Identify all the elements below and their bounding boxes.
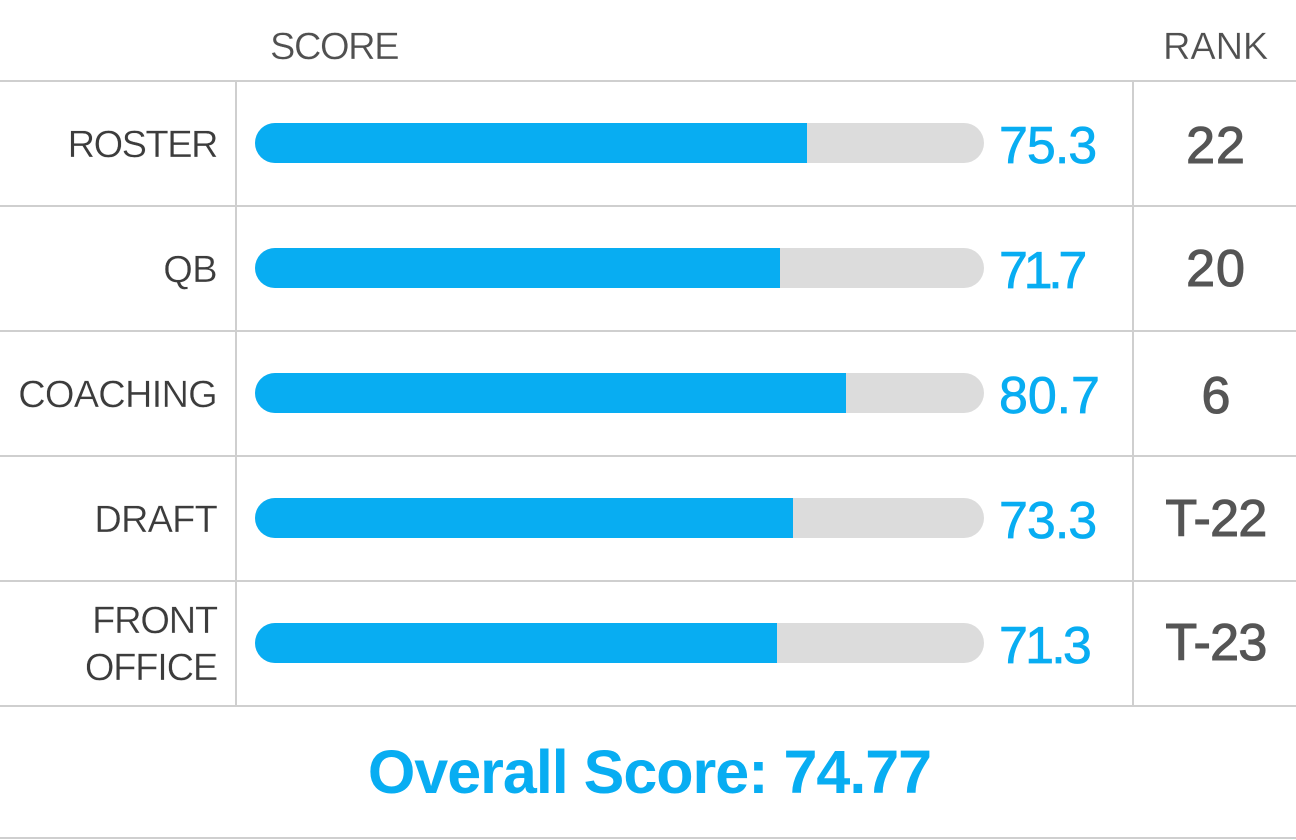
bar: draft 73.3 [255,498,984,538]
label: roster: ROSTER [68,124,217,166]
label: front office [85,600,218,689]
bar: front office 71.3 [255,623,984,663]
rank: coaching: 6 [1202,367,1230,425]
label: draft: DRAFT [94,499,217,541]
rank: QB: 20 [1186,240,1246,298]
label: front office: FRONT [92,600,217,642]
row: coaching [18,367,1230,425]
rank: roster: 22 [1186,117,1246,175]
row: roster [68,117,1246,175]
label: front office: OFFICE [85,647,217,689]
row: QB [163,240,1246,300]
value: draft: 73.3 [999,492,1096,550]
value: QB: 71.7 [999,242,1083,300]
value: front office: 71.3 [999,617,1089,675]
rank column header: RANK [1163,26,1268,68]
value: roster: 75.3 [999,117,1096,175]
rank: front office: T-23 [1165,614,1267,672]
label: QB: QB [163,249,217,291]
score column header: SCORE [270,26,398,68]
bar: roster 75.3 [255,123,984,163]
bar: coaching 80.7 [255,373,984,413]
rank: draft: T-22 [1165,490,1267,548]
bar: QB 71.7 [255,248,984,288]
row: front office [85,600,1267,689]
label: coaching: COACHING [18,374,217,416]
row: draft [94,490,1267,550]
value: coaching: 80.7 [999,367,1100,425]
overall score: Overall Score: 74.77 [368,738,931,806]
